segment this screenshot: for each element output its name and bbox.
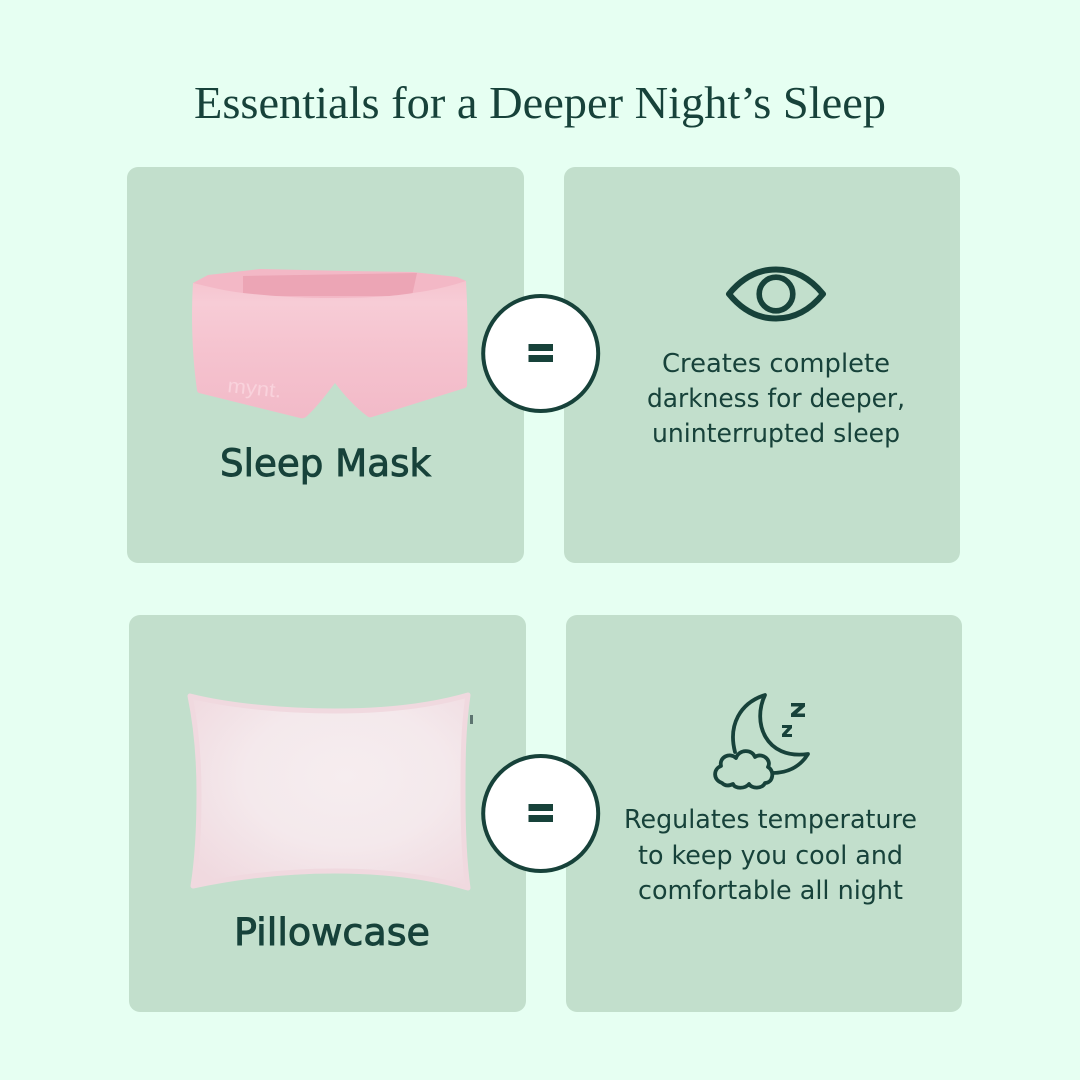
label: pillowcase: Pillowcase: [234, 911, 430, 954]
label: sleep mask: Sleep Mask: [220, 442, 432, 485]
text: embossed logo: mynt.: [226, 375, 282, 403]
text: pillowcase benefit: comfortable all night: [638, 876, 903, 906]
image: pink pillowcase: [190, 695, 473, 888]
text: sleep mask benefit: darkness for deeper,: [647, 384, 905, 414]
icon: equals badge top: [483, 296, 598, 411]
panel: sleep mask benefit: [564, 167, 960, 563]
text: sleep mask benefit: [647, 349, 905, 449]
icon: eye: [729, 270, 823, 318]
title: Essentials for a Deeper Night’s Sleep: [194, 77, 886, 128]
icon: moon, cloud and z's: [715, 695, 808, 788]
text: sleep mask benefit: uninterrupted sleep: [652, 419, 900, 449]
panel: pillowcase: [129, 615, 526, 1012]
text: pillowcase benefit: Regulates temperature: [624, 805, 917, 835]
panel: sleep mask: [127, 167, 524, 563]
image: pink sleep mask: [192, 269, 468, 418]
text: pillowcase benefit: [624, 805, 917, 906]
text: pillowcase benefit: to keep you cool and: [638, 841, 903, 871]
panel: pillowcase benefit: [566, 615, 962, 1012]
text: sleep mask benefit: Creates complete: [662, 349, 890, 379]
icon: equals badge bottom: [483, 756, 598, 871]
